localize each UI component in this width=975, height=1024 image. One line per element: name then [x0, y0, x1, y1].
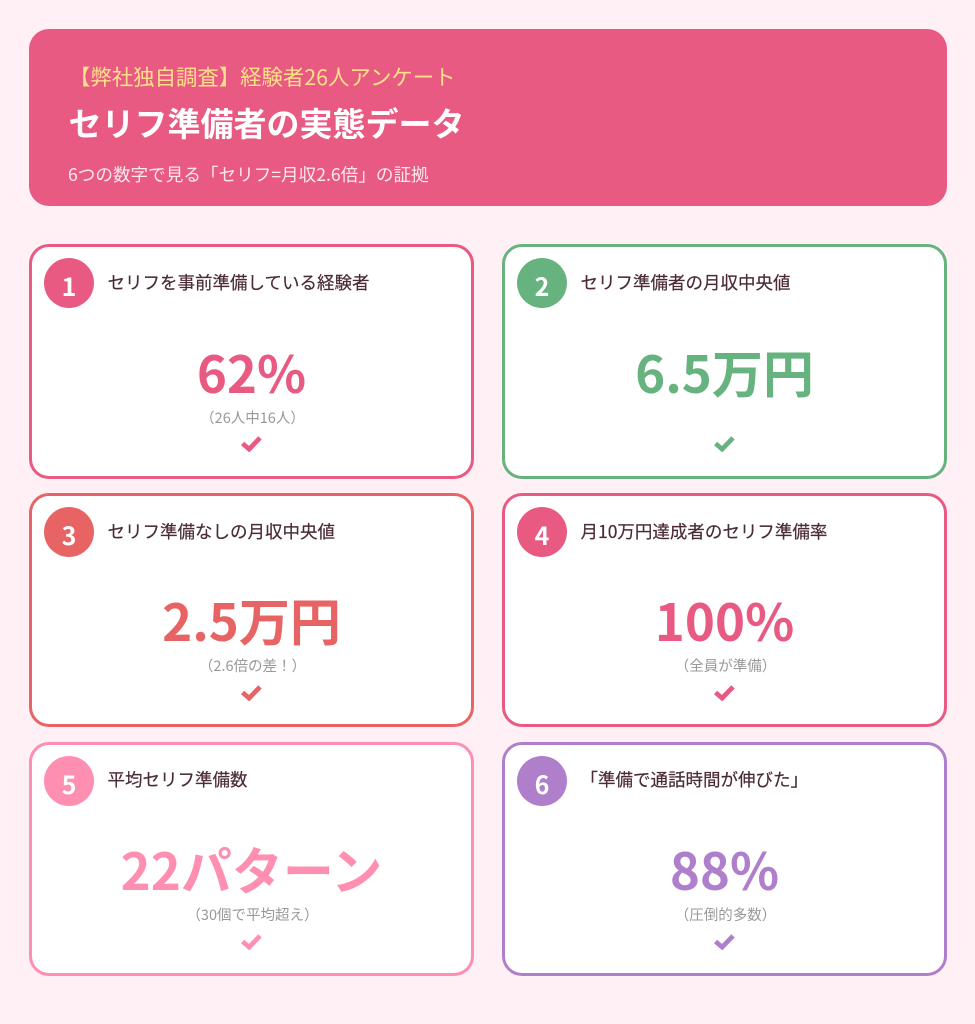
icon: check 4: [714, 685, 735, 701]
header eyebrow: 【弊社独自調査】経験者26人アンケート: [69, 61, 456, 92]
badge 4: 4: [535, 517, 549, 553]
note 3: （2.6倍の差！）: [199, 655, 306, 676]
header subtitle: 6つの数字で見る「セリフ=月収2.6倍」の証拠: [68, 162, 429, 187]
badge 3: [44, 507, 94, 557]
panel: card 6: [502, 742, 947, 976]
icon: check 6: [714, 934, 735, 950]
label 5: 平均セリフ準備数: [108, 767, 248, 792]
note 5: （30個で平均超え）: [186, 904, 319, 925]
value 3: 2.5万円: [162, 582, 341, 656]
icon: check 2: [714, 436, 735, 452]
label 3: セリフ準備なしの月収中央値: [108, 519, 335, 544]
panel: card 4: [502, 493, 947, 727]
badge 4: [517, 507, 567, 557]
label 1: セリフを事前準備している経験者: [108, 270, 369, 295]
badge 3: 3: [62, 517, 76, 553]
panel: card 3: [29, 493, 474, 727]
badge 6: 6: [535, 766, 549, 802]
badge 2: [517, 258, 567, 308]
badge 1: [44, 258, 94, 308]
label 2: セリフ準備者の月収中央値: [580, 270, 790, 295]
panel: card 2: [502, 244, 947, 479]
label 6: 「準備で通話時間が伸びた」: [580, 767, 808, 792]
panel: card 5: [29, 742, 474, 976]
label 4: 月10万円達成者のセリフ準備率: [580, 519, 827, 544]
value 2: 6.5万円: [635, 334, 814, 408]
value 4: 100%: [655, 582, 794, 656]
badge 6: [517, 756, 567, 806]
header banner: [29, 29, 947, 206]
note 1: （26人中16人）: [200, 407, 305, 428]
value 6: 88%: [670, 831, 779, 905]
badge 5: 5: [62, 766, 76, 802]
value 1: 62%: [197, 334, 306, 408]
value 5: 22パターン: [121, 831, 382, 905]
title: セリフ準備者の実態データ: [68, 98, 464, 146]
icon: check 1: [241, 436, 262, 452]
icon: check 3: [241, 685, 262, 701]
icon: check 5: [241, 934, 262, 950]
badge 1: 1: [62, 268, 76, 304]
badge 5: [44, 756, 94, 806]
badge 2: 2: [535, 268, 549, 304]
note 4: （全員が準備）: [675, 655, 776, 676]
panel: card 1: [29, 244, 474, 479]
note 6: （圧倒的多数）: [675, 904, 776, 925]
